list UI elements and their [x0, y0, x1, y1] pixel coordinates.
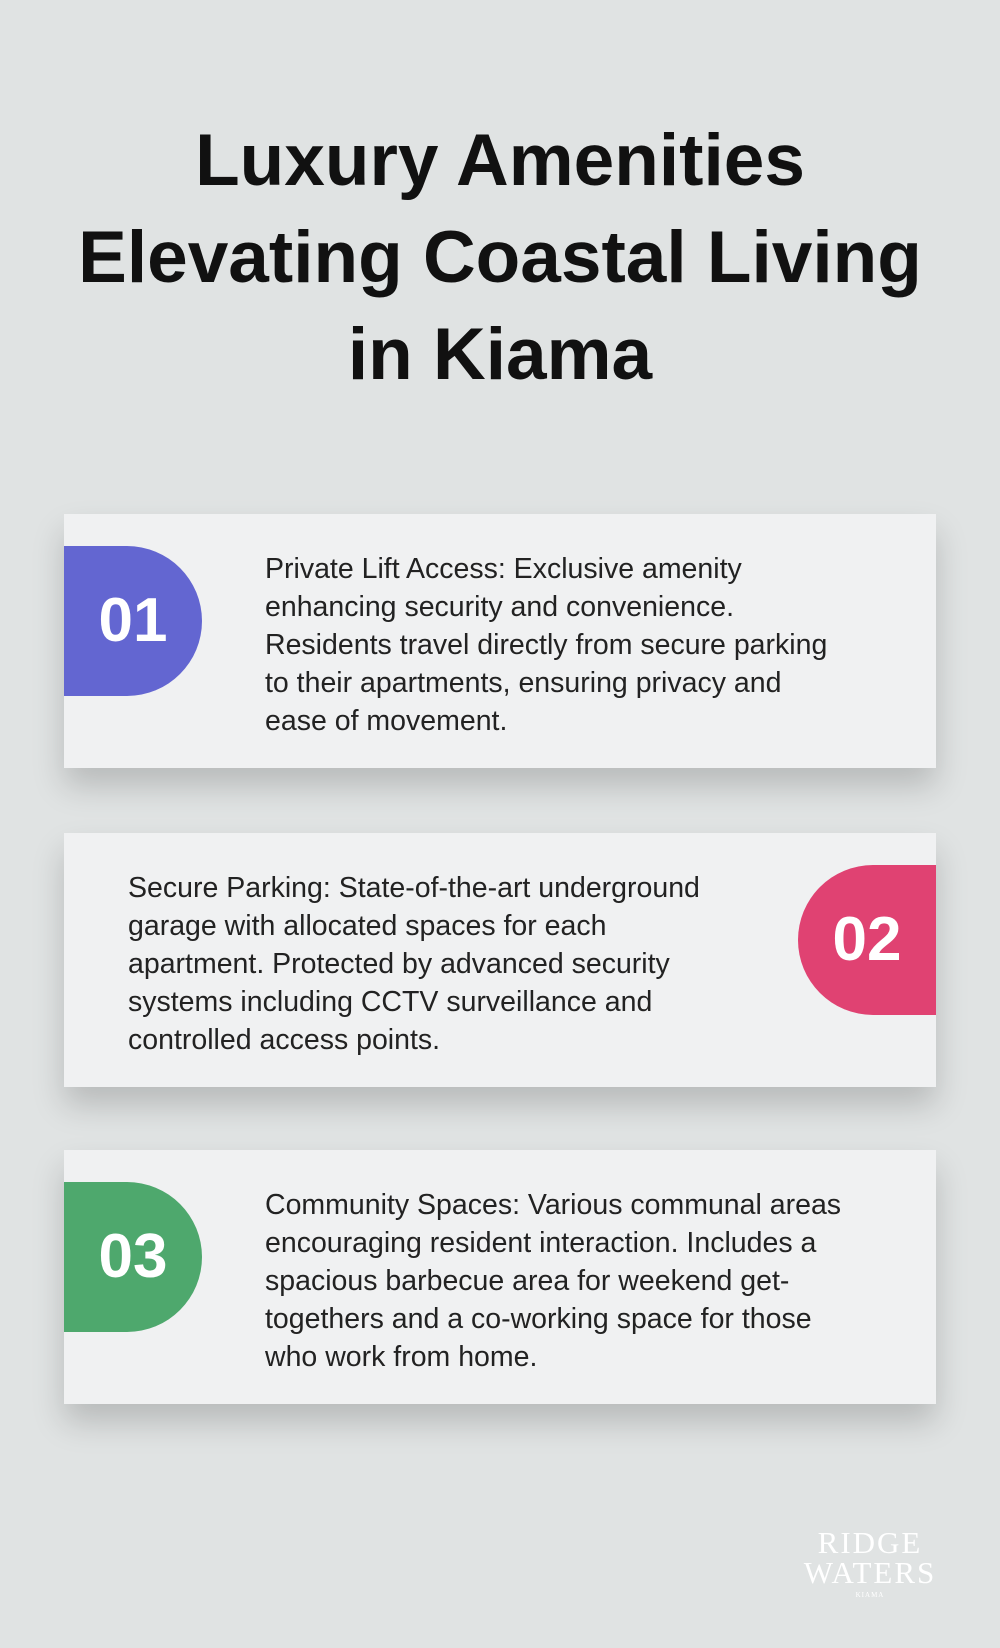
badge 01: 01: [99, 586, 167, 655]
text 01: Residents travel directly from secure parking: [265, 629, 827, 661]
text 02: [128, 872, 700, 1056]
title: in Kiama: [348, 314, 652, 395]
text 01: Private Lift Access: Exclusive amenity: [265, 553, 742, 585]
text 01: [265, 553, 827, 737]
badge 01: [64, 546, 202, 696]
text 03: Community Spaces: Various communal areas: [265, 1189, 841, 1221]
logo: [804, 1525, 936, 1599]
panel: item 02: [64, 833, 936, 1087]
text 01: ease of movement.: [265, 705, 507, 737]
text 02: garage with allocated spaces for each: [128, 910, 606, 942]
panel: item 01: [64, 514, 936, 768]
title: [78, 120, 922, 395]
text 03: spacious barbecue area for weekend get-: [265, 1265, 789, 1297]
text 01: enhancing security and convenience.: [265, 591, 734, 623]
text 01: to their apartments, ensuring privacy and: [265, 667, 781, 699]
text 02: apartment. Protected by advanced security: [128, 948, 670, 980]
panel: item 03: [64, 1150, 936, 1404]
text 03: togethers and a co-working space for those: [265, 1303, 812, 1335]
text 03: who work from home.: [265, 1341, 537, 1373]
text 03: encouraging resident interaction. Includes a: [265, 1227, 816, 1259]
title: Luxury Amenities: [195, 120, 805, 201]
badge 02: [798, 865, 936, 1015]
title: Elevating Coastal Living: [78, 217, 922, 298]
text 02: controlled access points.: [128, 1024, 440, 1056]
badge 02: 02: [833, 905, 901, 974]
text 03: [265, 1189, 841, 1373]
logo: RIDGE: [818, 1525, 922, 1560]
badge 03: 03: [99, 1222, 167, 1291]
logo: KIAMA: [856, 1591, 884, 1599]
text 02: Secure Parking: State-of-the-art underground: [128, 872, 700, 904]
badge 03: [64, 1182, 202, 1332]
logo: WATERS: [804, 1555, 936, 1590]
text 02: systems including CCTV surveillance and: [128, 986, 652, 1018]
